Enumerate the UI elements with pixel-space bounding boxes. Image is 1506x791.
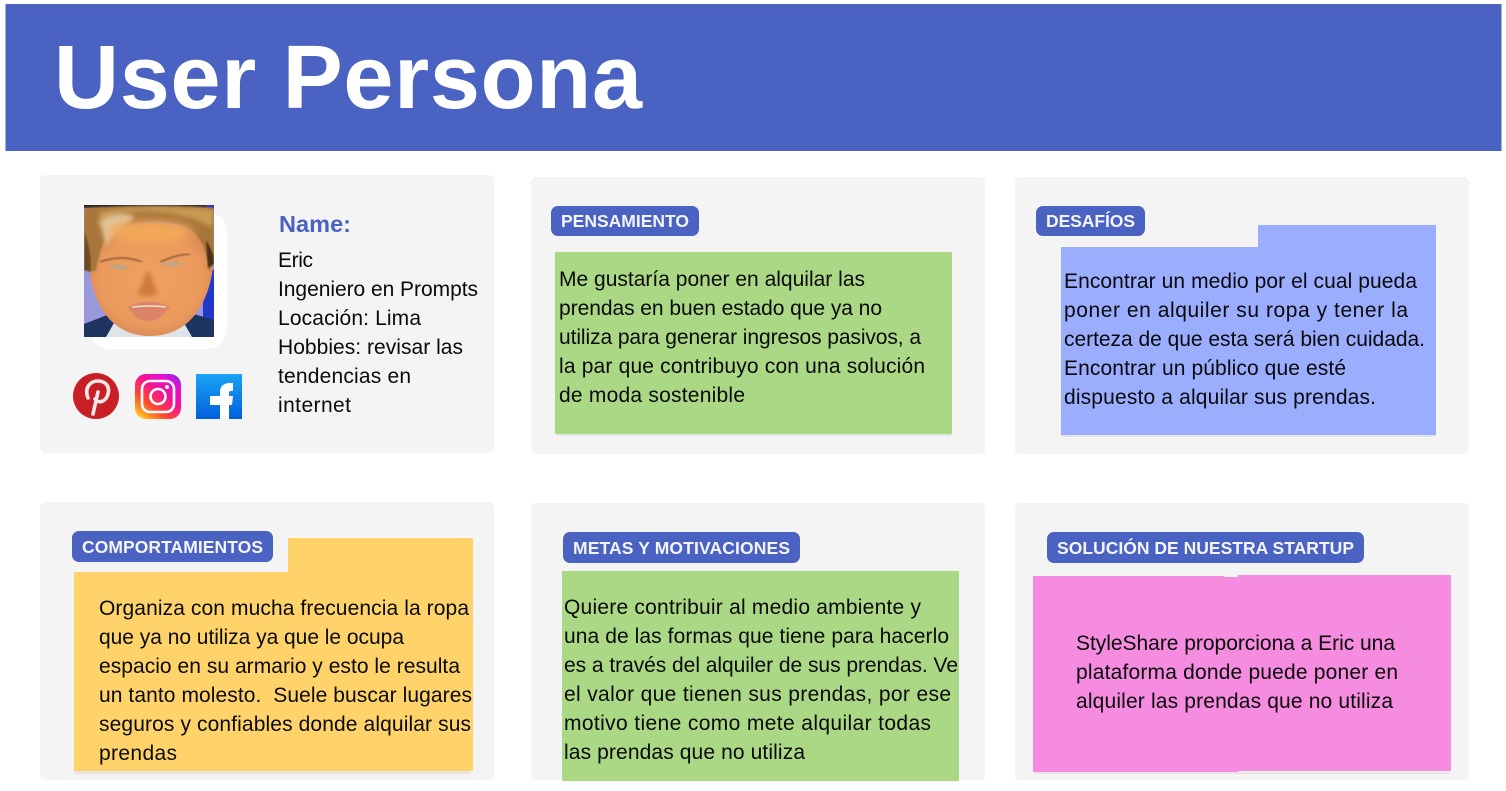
sticky note: desafios: poner en alquiler su ropa y tener la <box>1064 299 1408 322</box>
icon: facebook <box>196 374 242 419</box>
profile details: Locación: Lima <box>278 307 421 330</box>
tag: pensamiento: PENSAMIENTO <box>561 211 689 231</box>
profile details: tendencias en <box>278 365 411 388</box>
sticky note: comportamientos: que ya no utiliza ya que le ocupa <box>99 626 404 649</box>
profile details: Eric <box>278 249 313 272</box>
sticky note: desafios: certeza de que esta será bien cuidada. <box>1064 328 1425 351</box>
panel: solucion <box>1015 503 1469 780</box>
profile details <box>278 249 478 417</box>
icon: pinterest <box>73 373 119 419</box>
name heading: Name: <box>279 211 351 237</box>
tag: metas y motivaciones <box>563 532 800 563</box>
tag: solucion: SOLUCIÓN DE NUESTRA STARTUP <box>1057 537 1354 558</box>
icon: instagram <box>135 374 181 419</box>
sticky note: comportamientos: espacio en su armario y esto le resulta <box>99 655 460 678</box>
sticky note: desafios: Encontrar un medio por el cual pueda <box>1064 270 1417 293</box>
sticky note: comportamientos: Organiza con mucha frecuencia la ropa <box>99 597 469 620</box>
panel: pensamiento <box>531 177 985 454</box>
panel: profile <box>40 175 494 453</box>
sticky note: desafios: Encontrar un público que esté <box>1064 357 1346 380</box>
sticky note: pensamiento: prendas en buen estado que ya no <box>559 297 882 320</box>
sticky note: pensamiento <box>555 252 952 436</box>
sticky note: solucion: alquiler las prendas que no utiliza <box>1076 690 1393 713</box>
profile details: Ingeniero en Prompts <box>278 278 478 301</box>
panel: desafios <box>1015 177 1469 454</box>
sticky note: pensamiento: Me gustaría poner en alquilar las <box>559 268 865 291</box>
panel: comportamientos <box>40 502 494 780</box>
sticky note: solucion: plataforma donde puede poner en <box>1076 661 1398 684</box>
sticky note: pensamiento: utiliza para generar ingresos pasivos, a <box>559 326 921 349</box>
sticky note: desafios: dispuesto a alquilar sus prendas. <box>1064 386 1376 409</box>
title: User Persona <box>54 28 643 128</box>
sticky note: pensamiento: de moda sostenible <box>559 384 745 407</box>
sticky note: desafios <box>1061 225 1436 437</box>
panel: metas y motivaciones <box>531 503 985 781</box>
sticky note: pensamiento: la par que contribuyo con una solución <box>559 355 925 378</box>
sticky note: metas: una de las formas que tiene para hacerlo <box>564 625 949 648</box>
header banner <box>6 4 1502 151</box>
portrait photo <box>84 205 214 337</box>
tag: metas y motivaciones: METAS Y MOTIVACIONES <box>573 538 790 558</box>
sticky note: solucion: StyleShare proporciona a Eric una <box>1076 632 1395 655</box>
tag: pensamiento <box>551 206 699 236</box>
sticky note: comportamientos <box>74 538 473 774</box>
profile details: internet <box>278 394 351 417</box>
tag: comportamientos <box>72 531 273 562</box>
sticky note: comportamientos: prendas <box>99 742 177 765</box>
sticky note: solucion <box>1033 575 1451 774</box>
sticky note: metas: Quiere contribuir al medio ambiente y <box>564 596 922 619</box>
tag: desafios <box>1036 206 1145 236</box>
sticky note: metas: el valor que tienen sus prendas, por ese <box>564 683 951 706</box>
tag: comportamientos: COMPORTAMIENTOS <box>82 537 263 557</box>
sticky note: metas: las prendas que no utiliza <box>564 741 805 764</box>
tag: solucion <box>1047 532 1364 563</box>
sticky note: metas: es a través del alquiler de sus prendas. Ve <box>564 654 958 677</box>
sticky note: metas <box>562 571 959 781</box>
photo backing card <box>90 212 227 349</box>
sticky note: comportamientos: un tanto molesto. Suele buscar lugares <box>99 684 472 707</box>
sticky note: comportamientos: seguros y confiables donde alquilar sus <box>99 713 471 736</box>
sticky note: metas: motivo tiene como mete alquilar todas <box>564 712 931 735</box>
profile details: Hobbies: revisar las <box>278 336 463 359</box>
tag: desafios: DESAFÍOS <box>1046 210 1135 231</box>
